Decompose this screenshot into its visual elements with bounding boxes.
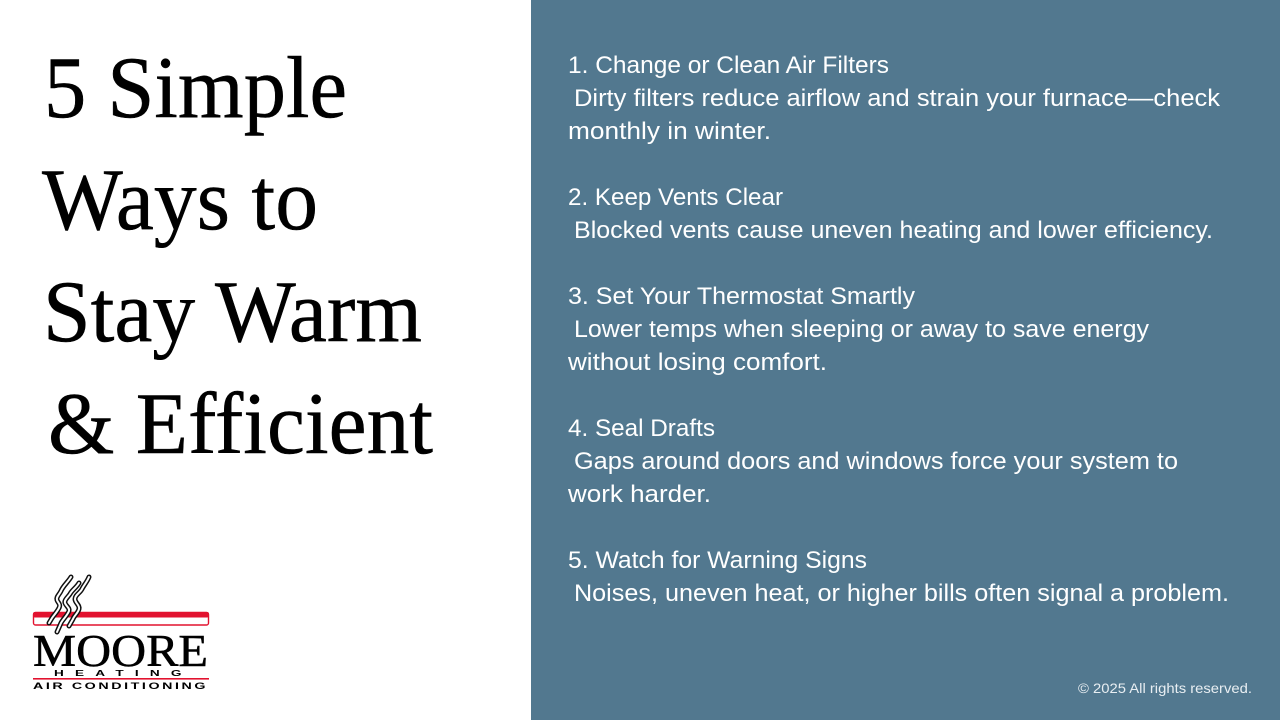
text block: tip 1 (568, 52, 1221, 145)
text block: tip 2: 2. Keep Vents Clear (568, 184, 783, 211)
text block: tip 3: Lower temps when sleeping or away to save energy (574, 316, 1150, 343)
text block: tip 1: 1. Change or Clean Air Filters (568, 52, 889, 79)
text block: tip 2 (568, 184, 1213, 244)
title (42, 40, 433, 473)
text block: tip 3: 3. Set Your Thermostat Smartly (568, 283, 916, 310)
text block: tip 4: work harder. (567, 481, 711, 508)
logo red rule (33, 678, 209, 680)
text block: tip 5 (568, 547, 1229, 607)
text block: tip 4: 4. Seal Drafts (568, 415, 715, 442)
text block: tip 4: Gaps around doors and windows force your system to (574, 448, 1178, 475)
icon: heat waves (49, 577, 89, 632)
text block: tip 2: Blocked vents cause uneven heating and lower efficiency. (574, 217, 1213, 244)
text block: tip 5: Noises, uneven heat, or higher bills often signal a problem. (574, 580, 1229, 607)
title: Ways to (42, 152, 318, 249)
text block: tip 1: monthly in winter. (568, 118, 771, 145)
logo words AIR CONDITIONING: AIR CONDITIONING (33, 680, 206, 691)
logo word HEATING: HEATING (54, 670, 182, 678)
logo wordmark MOORE: MOORE (33, 626, 208, 676)
text block: tip 3 (567, 283, 1150, 376)
text block: tip 5: 5. Watch for Warning Signs (568, 547, 867, 574)
title: & Efficient (48, 376, 433, 473)
copyright note: © 2025 All rights reserved. (1078, 680, 1252, 696)
logo: Moore Heating & Air Conditioning (33, 577, 209, 691)
title: Stay Warm (43, 264, 422, 361)
icon: red heater bar (33, 612, 209, 625)
text block: tip 4 (567, 415, 1178, 508)
text block: tip 3: without losing comfort. (567, 349, 827, 376)
text block: tip 1: Dirty filters reduce airflow and strain your furnace—check (574, 85, 1221, 112)
panel: tips background (531, 0, 1280, 720)
title: 5 Simple (44, 40, 347, 137)
